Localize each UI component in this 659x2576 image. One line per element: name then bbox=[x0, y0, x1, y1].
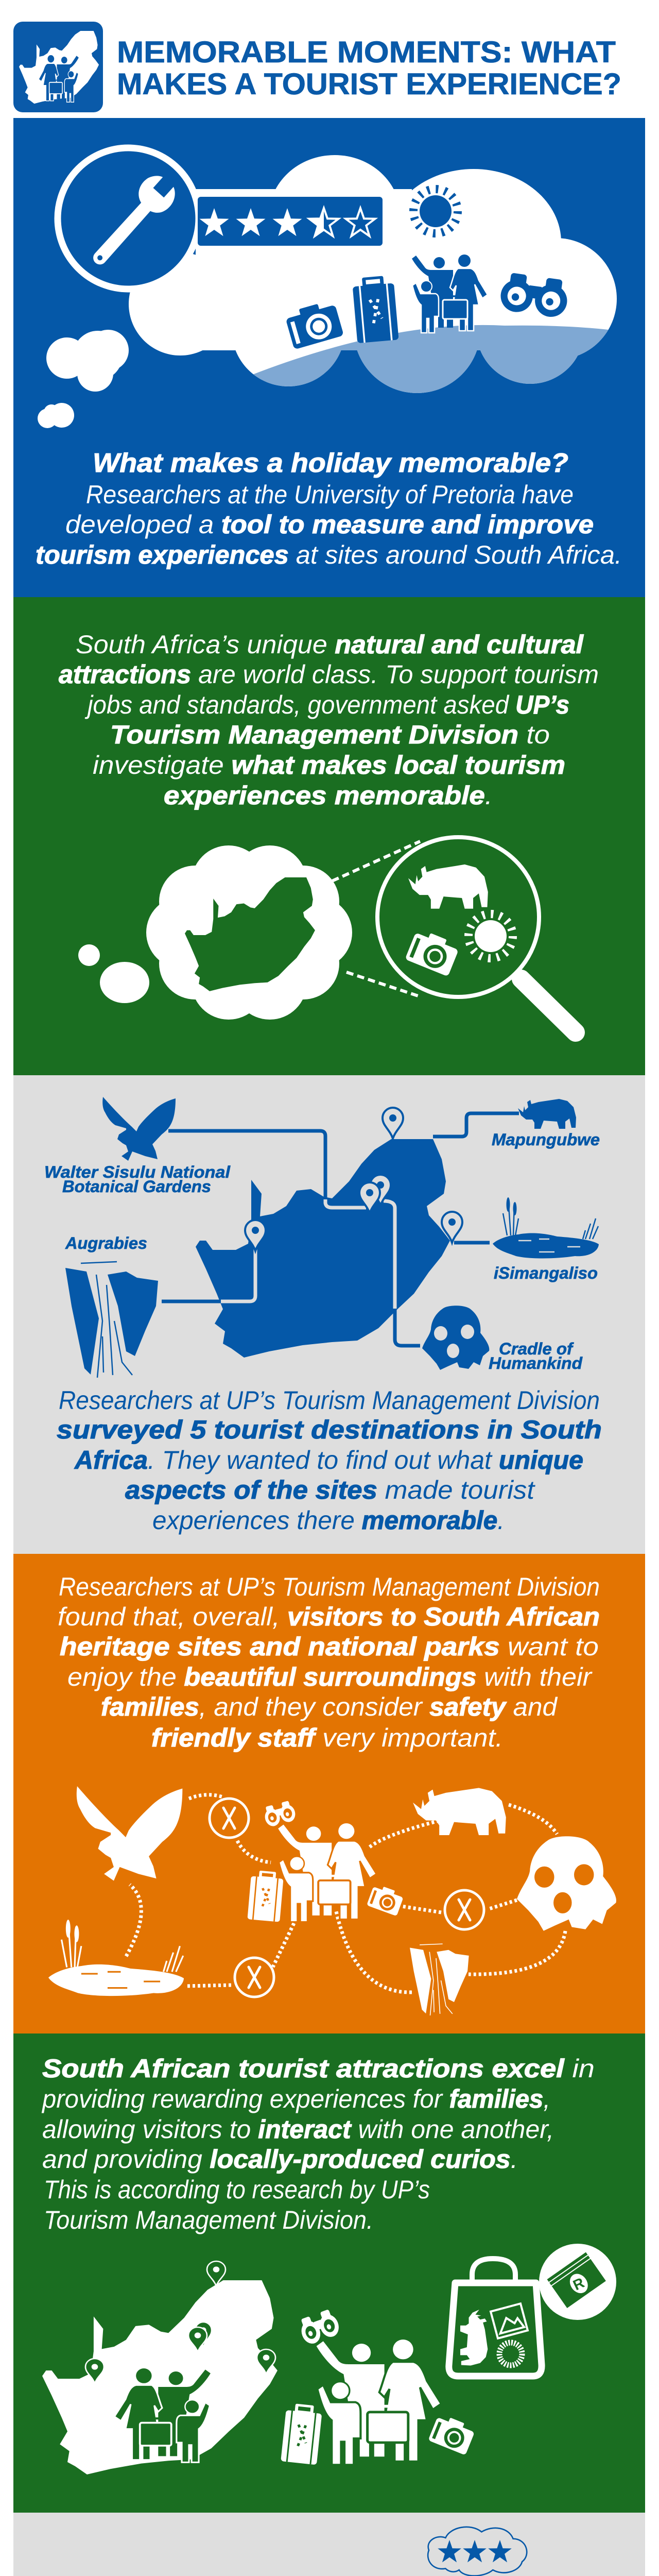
site: Walter Sisulu eagle: Walter Sisulu National bbox=[44, 1163, 231, 1181]
text: attractions: Tourism Management Division to bbox=[110, 720, 550, 749]
text: what makes a holiday memorable: tourism experiences at sites around South Africa. bbox=[36, 540, 622, 569]
text: surveyed 5 destinations: aspects of the sites made tourist bbox=[125, 1476, 535, 1504]
small thought clouds bbox=[38, 330, 129, 428]
icon: money circle bbox=[539, 2244, 616, 2320]
family with luggage bbox=[247, 1800, 405, 1922]
text: what attractions excel at bbox=[41, 2054, 595, 2234]
title: MAKES A TOURIST EXPERIENCE? bbox=[117, 67, 621, 101]
text: attractions: investigate what makes local tourism bbox=[93, 751, 565, 779]
text: what makes a holiday memorable bbox=[36, 448, 622, 569]
icon: camera bbox=[405, 928, 461, 977]
panel: research tool, grey bbox=[13, 2513, 645, 2576]
text: attractions: attractions are world class. To support tourism bbox=[59, 660, 599, 689]
site: Cradle of Humankind skull bbox=[422, 1306, 583, 1372]
dotted journey paths bbox=[126, 1795, 565, 1992]
header icon: South Africa map with family bbox=[13, 22, 103, 112]
text: findings bbox=[58, 1572, 600, 1752]
text: what makes a holiday memorable: developed a tool to measure and improve bbox=[65, 510, 594, 539]
icon: eagle bbox=[77, 1786, 182, 1881]
site: iSimangaliso wetland: iSimangaliso bbox=[494, 1264, 598, 1282]
text: findings: enjoy the beautiful surroundings with their bbox=[67, 1663, 593, 1691]
text: what attractions excel at: providing rewarding experiences for families, bbox=[41, 2084, 550, 2113]
text: findings: Researchers at UP’s Tourism Management Division bbox=[59, 1572, 600, 1601]
text: surveyed 5 destinations bbox=[57, 1386, 602, 1535]
text: what makes a holiday memorable: What makes a holiday memorable? bbox=[93, 448, 568, 478]
panel: attractions excel, green bbox=[13, 2033, 645, 2513]
text: surveyed 5 destinations: Researchers at UP’s Tourism Management Division bbox=[59, 1386, 600, 1415]
text: findings: families, and they consider safety and bbox=[101, 1692, 558, 1721]
text: attractions: jobs and standards, government asked UP’s bbox=[84, 690, 569, 719]
text: attractions: experiences memorable . bbox=[164, 781, 493, 810]
icon: rhino bbox=[408, 865, 488, 909]
family with luggage bbox=[281, 2308, 476, 2465]
panel: what visitors want, orange bbox=[13, 1554, 645, 2033]
site: Walter Sisulu eagle: Botanical Gardens bbox=[62, 1177, 211, 1196]
text: attractions: South Africa’s unique natural and cultural bbox=[76, 630, 584, 659]
site: Cradle of Humankind skull: Humankind bbox=[489, 1354, 583, 1372]
title: MEMORABLE MOMENTS: WHAT bbox=[117, 36, 616, 69]
stop markers bbox=[210, 1799, 484, 1997]
connector lines bbox=[162, 1113, 519, 1346]
icon: sun bbox=[413, 189, 458, 233]
illustration: cloud with South Africa map bbox=[78, 845, 352, 1020]
text: surveyed 5 destinations: surveyed 5 tourist destinations in South bbox=[57, 1415, 602, 1444]
text: what attractions excel at: Tourism Management Division. bbox=[44, 2206, 373, 2234]
icon: rhino bbox=[413, 1788, 506, 1835]
icon: skull bbox=[517, 1836, 616, 1931]
icon: camera bbox=[284, 299, 344, 350]
text: what attractions excel at: South African tourist attractions excel in bbox=[42, 2054, 595, 2083]
map of South Africa bbox=[196, 1139, 450, 1358]
dashed zoom lines bbox=[332, 841, 420, 996]
site: Augrabies waterfall bbox=[65, 1234, 158, 1378]
icon: binoculars bbox=[498, 272, 570, 319]
site: iSimangaliso wetland bbox=[493, 1197, 599, 1282]
icon: money circle: R bbox=[570, 2275, 587, 2293]
magnifying glass with rhino, sun and camera bbox=[377, 837, 576, 1032]
icon: suitcase bbox=[352, 275, 399, 343]
panel: surveyed destinations, grey bbox=[13, 1075, 645, 1554]
icon: wetland bbox=[48, 1920, 184, 1996]
text: findings: found that, overall, visitors to South African bbox=[58, 1602, 600, 1631]
icon: waterfall bbox=[410, 1944, 469, 2015]
title bbox=[117, 36, 621, 101]
text: attractions bbox=[59, 630, 599, 810]
text: what attractions excel at: and providing locally-produced curios . bbox=[42, 2145, 518, 2174]
South Africa map with family and pins bbox=[42, 2261, 278, 2475]
text: findings: friendly staff very important. bbox=[151, 1723, 503, 1752]
site: Cradle of Humankind skull: Cradle of bbox=[499, 1340, 574, 1358]
illustration: thought cloud bbox=[38, 148, 618, 428]
text: findings: heritage sites and national parks want to bbox=[60, 1632, 599, 1661]
text: what attractions excel at: allowing visitors to interact with one another, bbox=[42, 2115, 554, 2144]
shopping bag of curios bbox=[449, 2259, 542, 2376]
text: what attractions excel at: This is according to research by UP’s bbox=[44, 2175, 430, 2204]
icon: sun bbox=[469, 914, 513, 958]
icon: family bbox=[412, 255, 488, 333]
panel: intro, blue bbox=[13, 118, 645, 597]
star rating bar bbox=[198, 197, 383, 246]
panel: natural and cultural attractions, green bbox=[13, 597, 645, 1075]
site: Augrabies waterfall: Augrabies bbox=[65, 1234, 147, 1252]
text: surveyed 5 destinations: Africa. They wanted to find out what unique bbox=[74, 1446, 583, 1475]
site: Walter Sisulu eagle bbox=[44, 1097, 231, 1196]
text: surveyed 5 destinations: experiences there memorable. bbox=[152, 1506, 505, 1535]
magnifier with wrench bbox=[58, 148, 199, 289]
site: Mapungubwe rhino bbox=[492, 1099, 600, 1149]
text: what makes a holiday memorable: Researchers at the University of Pretoria have bbox=[86, 480, 574, 509]
location pins bbox=[245, 1108, 462, 1251]
family on top step, three stars bbox=[420, 2527, 527, 2576]
site: Mapungubwe rhino: Mapungubwe bbox=[492, 1130, 600, 1149]
